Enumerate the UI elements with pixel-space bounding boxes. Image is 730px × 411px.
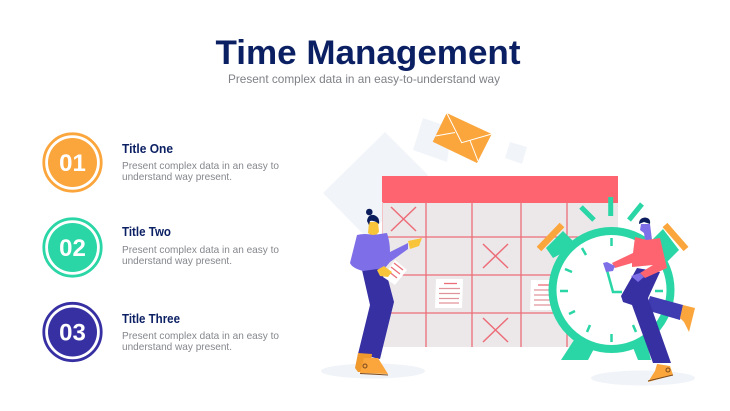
text three: understand way present. [122,342,232,353]
badge 01: 01 [59,150,86,177]
heading one: Title One [122,141,173,156]
title: Time Management [216,34,521,72]
item three [44,303,279,361]
item one [44,134,279,191]
heading two: Title Two [122,224,171,239]
item two [44,219,279,276]
text two: Present complex data in an easy to [122,245,279,256]
text two: understand way present. [122,256,232,267]
background shapes [323,118,527,237]
badge 01 [44,134,101,191]
illustration [321,113,695,386]
text one: understand way present. [122,172,232,183]
badge 02 [44,219,101,276]
badge 03 [44,303,101,361]
man [591,218,695,386]
icon: envelope [433,113,492,163]
text one: Present complex data in an easy to [122,161,279,172]
text three: Present complex data in an easy to [122,331,279,342]
alarm clock [539,197,686,360]
calendar [382,176,618,347]
badge 03: 03 [59,320,86,346]
badge 02: 02 [59,235,86,262]
subtitle: Present complex data in an easy-to-understand way [228,72,500,86]
woman [321,209,425,378]
heading three: Title Three [122,311,180,326]
note partly hidden [530,280,558,310]
cross marks [391,207,508,342]
note [435,279,463,308]
